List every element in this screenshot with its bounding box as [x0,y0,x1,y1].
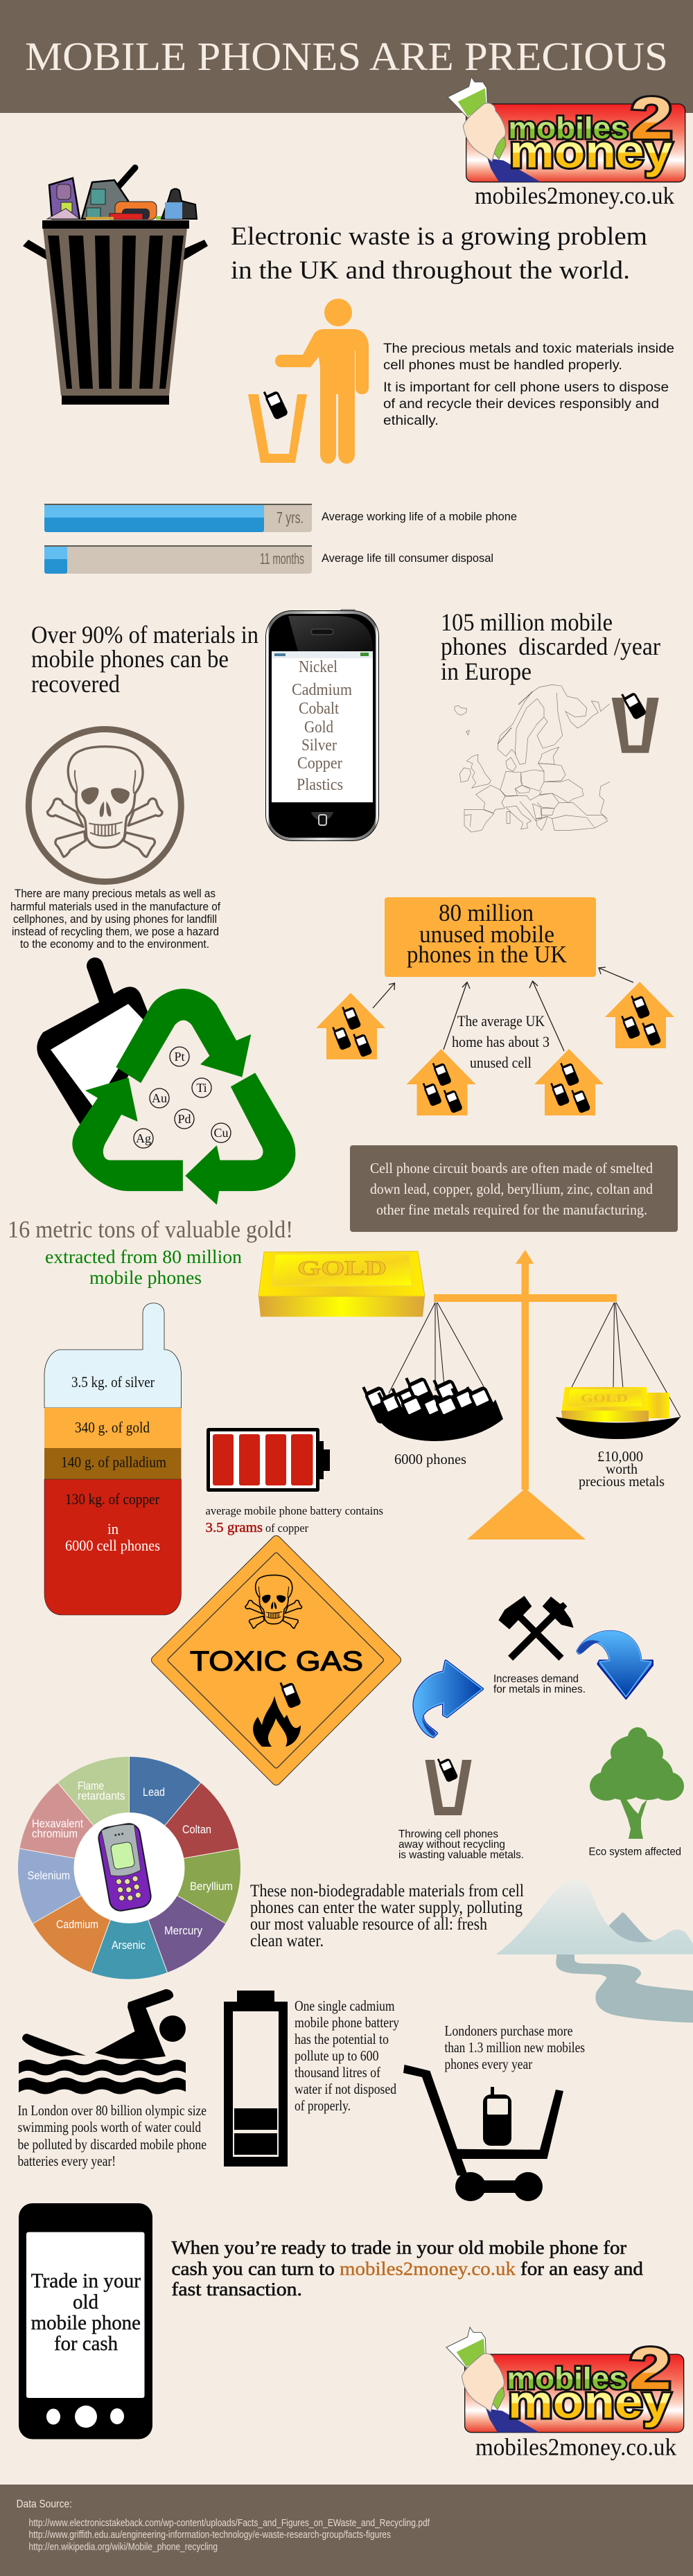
text: call to action: mobiles2money.co.uk [340,2259,516,2279]
slice labels: Selenium [28,1869,70,1882]
text: london swimming pools: In London over 80 billion olympic size [18,2102,207,2119]
icon: swimmer [19,1989,186,2094]
title: MOBILE PHONES ARE PRECIOUS [25,34,668,79]
icon: crossed hammers [498,1596,574,1658]
icon: trash can with phones [23,168,208,405]
text: london swimming pools: batteries every year! [18,2153,116,2169]
bar: consumer disposal: 11 months [260,550,304,567]
elements: precious metal symbols: Ti [196,1081,207,1095]
icon: tree [590,1727,684,1839]
heading: over 90% recovered [31,621,258,698]
panel: 80 million unused phones: 80 million [439,899,534,926]
logo: mobiles2money bottom [446,2327,684,2433]
slice labels: Cadmium [56,1918,98,1931]
text: londoners purchase: phones every year [445,2056,532,2072]
icon: big phone with trade in text: mobile phone [31,2311,141,2334]
text: call to action: for an easy and [520,2259,644,2279]
panel: circuit boards note: other fine metals required for the manufacturing. [376,1201,647,1218]
scale labels [394,1448,665,1490]
text: hazard note: to the economy and to the environment. [20,937,209,951]
text: increases demand: for metals in mines. [493,1684,586,1695]
text: cadmium battery: water if not disposed [295,2081,396,2097]
text: londoners purchase: than 1.3 million new mobiles [445,2039,585,2056]
text: cadmium battery: pollute up to 600 [295,2047,378,2064]
text: londoners purchase: Londoners purchase more [445,2022,572,2039]
bar: consumer disposal [44,545,493,574]
icon: toxic gas diamond: TOXIC GAS [190,1646,363,1677]
logo: mobiles2money top: money [509,127,672,178]
text: london swimming pools: swimming pools worth of water could [18,2119,201,2135]
left pan with phones [361,1371,503,1441]
text: londoners purchase [445,2022,585,2072]
text: eco system affected: Eco system affected [589,1846,681,1858]
icon: big phone with trade in text: old [73,2291,98,2313]
panel: circuit boards note [350,1145,678,1232]
slice labels: chromium [32,1828,78,1840]
text: water supply: clean water. [250,1932,324,1950]
panel: circuit boards note: down lead, copper, gold, beryllium, zinc, coltan and [370,1181,653,1197]
materials list: Cobalt [299,700,339,718]
icon: shopping cart with phone [403,2065,563,2201]
text: battery copper note: 3.5 grams [205,1520,263,1535]
text: call to action: When you’re ready to trade in your old mobile phone for [172,2237,626,2258]
text: extracted from phones: mobile phones [89,1267,202,1288]
heading: electronic waste [231,222,647,285]
icon: phone behind recycle symbol [37,966,156,1136]
elements: precious metal symbols: Cu [213,1126,229,1140]
icon: gold bar: GOLD [297,1257,387,1280]
slice labels: Beryllium [190,1880,233,1893]
text: cadmium battery: One single cadmium [295,1997,395,2014]
text: call to action: fast transaction. [172,2279,302,2300]
text: hazard note: harmful materials used in the manufacture of [10,900,220,913]
text: average UK home: home has about 3 [452,1033,550,1050]
icon: house 1 [316,993,385,1059]
elements: precious metal symbols [134,1047,231,1148]
logo url top: mobiles2money.co.uk [475,182,674,209]
logo: mobiles2money top [448,77,685,182]
slice labels: Flame [78,1780,104,1792]
heading: 16 metric tons of gold: 16 metric tons of valuable gold! [8,1216,293,1243]
icon: tall battery [224,1991,288,2167]
text: average UK home: unused cell [470,1054,532,1071]
footer: data sources: Data Source: [17,2498,72,2510]
logo: mobiles2money top: 2 [630,85,673,152]
logo: mobiles2money bottom: mobiles [507,2362,627,2395]
icon: recycle symbol [73,989,295,1204]
slice labels: Mercury [164,1925,203,1937]
right pan with gold [556,1387,681,1439]
bar: working life: Average working life of a mobile phone [322,511,517,523]
map: Europe [455,685,610,832]
icon: house 3 [534,1049,604,1115]
text: london swimming pools: be polluted by discarded mobile phone [18,2136,207,2153]
heading: over 90% recovered: recovered [31,670,120,698]
logo: mobiles2money bottom: 2 [629,2336,672,2402]
icon: bin with phone [612,688,659,753]
icon: big phone with trade in text: Trade in your [31,2270,141,2293]
text: cadmium battery: has the potential to [295,2031,389,2047]
logo: mobiles2money top: mobiles [508,112,629,145]
heading: 105 million discarded: phones discarded /year [441,633,660,660]
text: cadmium battery: thousand litres of [295,2064,380,2081]
icon: big phone with trade in text: for cash [54,2332,118,2355]
text: precious metals and toxic materials: of and recycle their devices responsibly and [383,397,659,412]
heading: 105 million discarded: 105 million mobile [441,608,613,636]
logo: mobiles2money bottom: money [508,2377,671,2428]
panel: phone metal breakdown: 3.5 kg. of silver [71,1373,155,1391]
icon: toxic gas diamond [156,1540,396,1781]
footer: data sources: http://en.wikipedia.org/wiki/Mobile_phone_recycling [29,2541,218,2552]
panel: phone metal breakdown [44,1303,182,1615]
scale strings [389,1303,681,1417]
text: increases demand: Increases demand [493,1673,579,1685]
slice labels: Coltan [182,1824,211,1836]
footer: data sources: http://www.griffith.edu.au/engineering-information-technology/e-waste-research-group/facts-figures [29,2529,391,2541]
materials list: Silver [301,736,337,755]
icon: skull and crossbones [28,729,181,881]
heading: electronic waste: Electronic waste is a growing problem [231,222,647,251]
slice labels: retardants [78,1790,125,1803]
text: precious metals and toxic materials: ethically. [383,414,439,428]
icon: gold bar [258,1251,425,1316]
elements: precious metal symbols: Pd [177,1112,191,1126]
slice labels [28,1780,233,1952]
text: average UK home: The average UK [457,1012,545,1030]
text: water supply: our most valuable resource of all: fresh [250,1915,487,1934]
bar chart: phone lifetime [44,504,517,574]
icon: mountains and river [495,1880,693,2022]
elements: precious metal symbols: Au [152,1091,167,1105]
text: cadmium battery: of properly. [295,2097,351,2114]
heading: electronic waste: in the UK and throughout the world. [231,256,630,285]
heading: over 90% recovered: Over 90% of materials in [31,621,258,649]
text: water supply: phones can enter the water supply, polluting [250,1898,523,1917]
right pan with gold: GOLD [581,1393,628,1404]
heading: 105 million discarded: in Europe [441,658,532,685]
text: water supply [250,1882,524,1950]
text: throwing cell phones: Throwing cell phones [398,1828,498,1840]
footer: data sources [0,2485,693,2576]
icon: balance scale [361,1250,681,1540]
panel: phone metal breakdown: in [107,1520,119,1537]
text: precious metals and toxic materials [383,342,674,428]
text: average UK home [452,1012,550,1071]
text: precious metals and toxic materials: cell phones must be handled properly. [383,358,622,373]
bar: working life [44,504,517,532]
panel: 80 million unused phones: unused mobile [419,921,554,948]
text: throwing cell phones: away without recycling [398,1839,505,1851]
header band [0,0,693,113]
text: battery copper note: average mobile phone battery contains [205,1504,383,1517]
arrows: houses to unused total [373,967,633,1051]
materials list: Copper [297,755,342,773]
panel: 80 million unused phones: phones in the UK [407,941,567,968]
text: extracted from phones [45,1246,243,1288]
text: battery copper note: of copper [265,1521,308,1535]
heading: over 90% recovered: mobile phones can be [31,645,229,673]
icon: person dropping phone in bin [248,299,369,464]
elements: precious metal symbols: Ag [136,1131,151,1145]
panel: circuit boards note: Cell phone circuit boards are often made of smelted [370,1160,653,1176]
text: cadmium battery [295,1997,399,2114]
icon: smartphone with materials list [265,609,379,841]
text: throwing cell phones: is wasting valuable metals. [398,1849,524,1861]
scale labels: worth [606,1461,638,1477]
icon: house 4 [605,982,674,1048]
slice labels: Lead [143,1786,165,1799]
panel: 80 million unused phones [385,897,596,977]
panel: phone metal breakdown: 130 kg. of copper [65,1490,160,1508]
text: call to action: cash you can turn to [172,2259,335,2279]
text: hazard note: cellphones, and by using phones for landfill [13,912,217,926]
footer: data sources: http://www.electronicstakeback.com/wp-content/uploads/Facts_and_Figures_on_EWaste_and_Recycling.pdf [29,2517,430,2529]
icon: blue arrow right [414,1661,482,1737]
bar: consumer disposal: Average life till consumer disposal [322,552,493,565]
old phones in can [47,168,197,220]
pie chart: hazardous materials [18,1756,240,1979]
panel: phone metal breakdown: 6000 cell phones [65,1537,160,1554]
text: water supply: These non-biodegradable materials from cell [250,1882,524,1900]
text: cadmium battery: mobile phone battery [295,2014,399,2031]
heading: 105 million discarded [441,608,660,685]
icon: red battery [207,1428,330,1492]
text: precious metals and toxic materials: It is important for cell phone users to dispose [383,380,669,395]
materials list: Cadmium [292,681,352,699]
text: increases demand [493,1673,586,1695]
text: london swimming pools [18,2102,207,2169]
icon: big phone with trade in text [19,2203,152,2439]
materials list [292,658,352,794]
icon: keypad phone [97,1822,152,1912]
text: hazard note: There are many precious metals as well as [15,887,216,900]
text: hazard note: instead of recycling them, we pose a hazard [12,925,219,938]
icon: brown bin with phone [426,1754,471,1815]
icon: blue arrow down [577,1631,653,1699]
text: extracted from phones: extracted from 80 million [45,1246,243,1267]
scale labels: 6000 phones [394,1451,466,1467]
panel: phone metal breakdown: 340 g. of gold [75,1419,150,1436]
materials list: Nickel [299,658,337,676]
logo url bottom: mobiles2money.co.uk [475,2434,676,2461]
text: battery copper note [205,1504,383,1535]
text: precious metals and toxic materials: The precious metals and toxic materials inside [383,342,674,356]
slice labels: Arsenic [112,1939,146,1952]
scale labels: £10,000 [597,1448,643,1465]
elements: precious metal symbols: Pt [174,1050,185,1064]
text: hazard note [10,887,220,951]
scale labels: precious metals [579,1473,665,1490]
bar: working life: 7 yrs. [277,509,304,527]
icon: house 2 [406,1049,475,1115]
materials list: Gold [304,718,333,736]
slice labels: Hexavalent [32,1818,83,1830]
text: call to action [172,2237,644,2300]
text: throwing cell phones [398,1828,524,1861]
panel: phone metal breakdown: 140 g. of palladium [61,1454,166,1470]
materials list: Plastics [297,776,343,794]
